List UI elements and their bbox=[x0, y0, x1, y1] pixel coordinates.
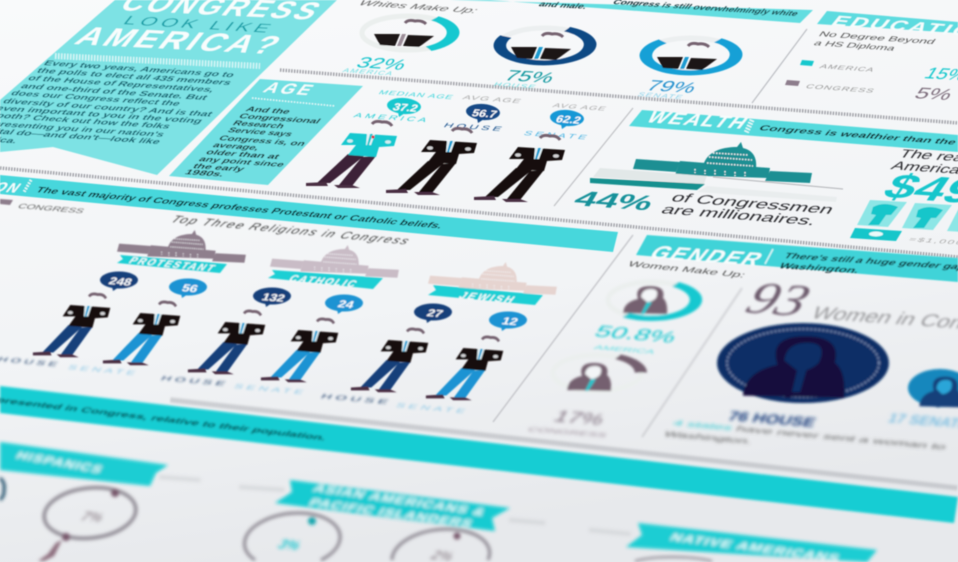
age text: Congressional bbox=[237, 112, 323, 125]
heading: wealth: WEALTH bbox=[642, 109, 754, 133]
labels: house and senate: HOUSE bbox=[159, 374, 231, 388]
bubble: 132 bbox=[253, 288, 291, 307]
bubble: 12: 12 bbox=[500, 316, 520, 328]
label: women make up: Women Make Up: bbox=[626, 260, 748, 279]
age text: Service says bbox=[226, 126, 295, 138]
label: Congress: CONGRESS bbox=[526, 427, 609, 439]
value: 93: 93 bbox=[738, 273, 819, 326]
figure: Protestant Senate bbox=[103, 302, 180, 365]
chart title: top three religions: Top Three Religions in Congress bbox=[168, 213, 414, 247]
legend: America: AMERICA bbox=[818, 64, 876, 73]
intro text: and one-third of the Senate. But bbox=[19, 82, 210, 102]
text: American: American bbox=[888, 158, 958, 177]
figure: Catholic House bbox=[188, 311, 265, 374]
label: House: HOUSE bbox=[442, 121, 507, 133]
panel: education bbox=[752, 11, 958, 103]
bar: millionaires bbox=[590, 168, 843, 202]
figure: Jewish Senate bbox=[426, 337, 503, 400]
band: minorities bbox=[0, 386, 958, 523]
label: avg age house: AVG AGE bbox=[461, 95, 523, 105]
bubble: 248: 248 bbox=[107, 276, 134, 288]
donut: Senate 79 percent bbox=[637, 34, 745, 76]
value: 44 percent: 44% bbox=[569, 187, 659, 215]
donut: America women 50.8 percent bbox=[600, 278, 704, 322]
labels: house and senate: SENATE bbox=[66, 363, 141, 377]
age text: Congress is, on bbox=[217, 134, 308, 148]
intro text: Every two years, Americans go to bbox=[42, 59, 237, 79]
bubble: 56 bbox=[169, 278, 207, 298]
label: 76 House: 76 HOUSE bbox=[725, 410, 818, 430]
heading: age: AGE bbox=[259, 79, 321, 99]
text: the real: The real bbox=[896, 146, 958, 164]
ribbon: Hispanics bbox=[0, 442, 168, 486]
text: are millionaires: are millionaires. bbox=[658, 203, 820, 228]
education question line 2: a HS Diploma bbox=[812, 39, 898, 52]
bubble: 37.2 bbox=[386, 97, 422, 117]
figure: Protestant House bbox=[33, 294, 110, 357]
panel: age bbox=[169, 79, 363, 185]
note: states without women: Washington. bbox=[662, 430, 755, 445]
icon: bill bbox=[850, 228, 902, 241]
panel: gender bbox=[626, 235, 958, 282]
ring: Asian Congress bbox=[392, 529, 490, 562]
icon: capitol teal bbox=[633, 142, 812, 183]
title: look like: LOOK LIKE bbox=[119, 14, 278, 36]
bubble: 62.2: 62.2 bbox=[554, 114, 583, 126]
band: religion bbox=[0, 175, 618, 252]
donut: House 75 percent bbox=[491, 24, 599, 66]
figure: House bbox=[386, 128, 477, 195]
legend: Congress: CONGRESS bbox=[804, 84, 876, 94]
panel: race donuts bbox=[341, 0, 745, 101]
bubble: 12 bbox=[489, 312, 527, 331]
bubble: 56.7: 56.7 bbox=[470, 108, 499, 120]
value: 32 percent: 32% bbox=[353, 54, 410, 73]
ribbon: Catholic: CATHOLIC bbox=[286, 274, 361, 289]
circle: 76 House bbox=[717, 323, 889, 403]
bubble: 248 bbox=[100, 272, 138, 291]
labels: house and senate: SENATE bbox=[232, 382, 309, 396]
ribbon: Hispanics: HISPANICS bbox=[13, 449, 107, 476]
value: 75 percent: 75% bbox=[501, 67, 558, 86]
note: states without women: 4 states have never sent a woman to bbox=[671, 419, 949, 451]
labels: house and senate bbox=[0, 355, 471, 415]
panel: wealth bbox=[569, 109, 958, 246]
age text: any point since bbox=[197, 155, 287, 168]
heading: education: EDUCATION bbox=[827, 12, 958, 41]
donut: Congress women 17 percent bbox=[545, 352, 649, 394]
bubble: 56: 56 bbox=[180, 283, 200, 295]
age text: 1980s. bbox=[183, 168, 227, 178]
icon: capitol Protestant bbox=[117, 230, 246, 263]
ribbon: Protestant: PROTESTANT bbox=[126, 256, 219, 274]
lower gender labels bbox=[526, 408, 958, 451]
circle: 17 Senate bbox=[908, 369, 958, 407]
age text: the early bbox=[191, 162, 247, 173]
ribbon: Native Americans: NATIVE AMERICANS bbox=[667, 531, 844, 562]
label: Senate: SENATE bbox=[636, 92, 685, 101]
minorities band text: presented in Congress, relative to their population. bbox=[0, 396, 329, 442]
band: race bbox=[450, 0, 813, 23]
age text: Research bbox=[231, 119, 287, 130]
label: median age: MEDIAN AGE bbox=[377, 90, 455, 101]
intro text: diversity of our country? And is that bbox=[1, 97, 215, 118]
bubble: 24: 24 bbox=[336, 299, 357, 311]
bubble: 56.7 bbox=[465, 103, 501, 123]
ring: Native bbox=[635, 557, 712, 561]
ribbon: Asian Americans: ASIAN AMERICANS & bbox=[310, 482, 490, 518]
gender band text line 2: Washington. bbox=[776, 262, 863, 276]
ring: Hispanic Congress: 7% bbox=[78, 509, 106, 526]
intro text: does our Congress reflect the bbox=[9, 89, 183, 108]
bubble: 24 bbox=[325, 294, 363, 314]
band text line 2: and male. bbox=[537, 0, 590, 10]
ribbon: Asian Americans: PACIFIC ISLANDERS bbox=[306, 496, 477, 529]
label: House: HOUSE bbox=[492, 82, 538, 91]
ribbon: Native Americans bbox=[626, 523, 877, 562]
age text: average, bbox=[211, 141, 262, 152]
value: 50.8 percent: 50.8% bbox=[591, 323, 681, 346]
figure: Jewish House bbox=[351, 329, 428, 392]
religion band text: The vast majority of Congress professes Protestant or Catholic beliefs. bbox=[33, 186, 445, 231]
ribbon: Catholic bbox=[268, 270, 383, 289]
bubble: 27 bbox=[414, 304, 452, 323]
value: 17 percent: 17% bbox=[550, 408, 609, 428]
icon: capitol Catholic bbox=[270, 245, 399, 278]
age text bbox=[183, 105, 323, 178]
ribbon: Jewish: JEWISH bbox=[456, 291, 519, 305]
labels: house and senate: SENATE bbox=[394, 401, 471, 415]
upper section bbox=[0, 0, 958, 257]
text: of Congressmen: of Congressmen bbox=[668, 191, 837, 217]
legend: bill value: =$1,000 bbox=[907, 237, 958, 246]
chart: median ages bbox=[306, 90, 608, 202]
labels: house and senate: HOUSE bbox=[319, 392, 394, 406]
label: America: AMERICA bbox=[352, 111, 432, 124]
ring: Asian America bbox=[244, 513, 340, 560]
panel: religion bbox=[0, 199, 633, 422]
education question: No Degree Beyond bbox=[817, 30, 938, 46]
figure: Senate bbox=[474, 135, 565, 202]
age text: And the bbox=[244, 105, 293, 116]
panel: minorities bbox=[0, 442, 877, 562]
icon: capitol Jewish bbox=[428, 262, 557, 295]
label: avg age senate: AVG AGE bbox=[551, 103, 608, 112]
title: America: AMERICA? bbox=[69, 21, 292, 60]
intro text bbox=[0, 59, 237, 146]
value: 79 percent: 79% bbox=[643, 77, 700, 96]
ring: Hispanic Congress bbox=[42, 483, 138, 543]
label: America: AMERICA bbox=[592, 345, 657, 355]
icons: money stacks bbox=[857, 200, 958, 233]
note: states without women bbox=[662, 419, 949, 451]
value: 5 percent: 5% bbox=[911, 84, 957, 103]
intro text: the polls to elect all 435 members bbox=[35, 66, 234, 87]
bubble: 132: 132 bbox=[260, 292, 287, 304]
ribbon: Asian Americans bbox=[275, 480, 510, 531]
intro text: of the House of Representatives, bbox=[26, 74, 217, 94]
icon: stand bbox=[38, 540, 62, 561]
donut: America 32 percent bbox=[354, 12, 462, 54]
label: America: AMERICA bbox=[341, 68, 395, 77]
legend: Congress: CONGRESS bbox=[16, 202, 86, 215]
ring: Hispanic left bbox=[0, 478, 4, 500]
ribbon: Jewish bbox=[428, 285, 543, 305]
figure: America bbox=[306, 121, 397, 188]
label: Senate: SENATE bbox=[522, 129, 592, 141]
heading: gender: GENDER bbox=[645, 242, 770, 270]
age text: older than at bbox=[204, 148, 282, 161]
panel: title bbox=[0, 0, 337, 175]
figure: Catholic Senate bbox=[261, 319, 338, 382]
bubble: 27: 27 bbox=[425, 308, 445, 320]
gender band text: There's still a huge gender gap in bbox=[781, 252, 958, 273]
bubble: 37.2: 37.2 bbox=[391, 102, 420, 114]
bubble: 62.2 bbox=[549, 109, 585, 129]
ring: Asian America: 3% bbox=[275, 537, 303, 554]
